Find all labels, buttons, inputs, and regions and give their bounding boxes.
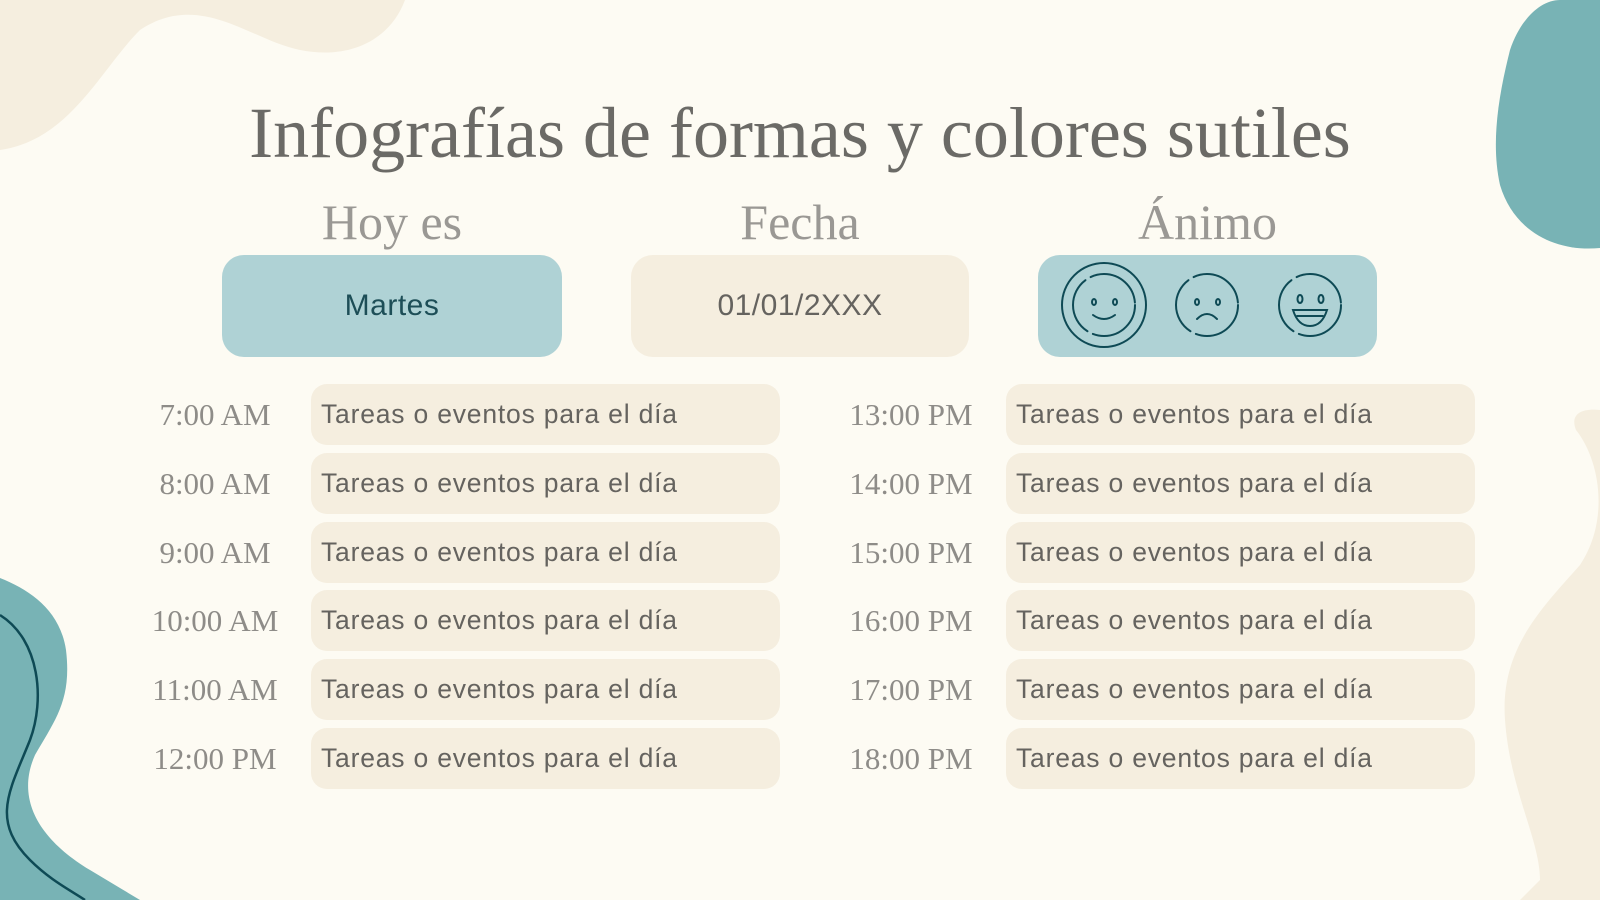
schedule: afternoon: 16:00 PM [849, 603, 973, 638]
schedule: afternoon: Tareas o eventos para el día [1016, 537, 1373, 567]
schedule: afternoon: 17:00 PM [849, 672, 973, 707]
icon: sad [1176, 274, 1238, 336]
schedule: afternoon: Tareas o eventos para el día [1016, 399, 1373, 429]
shape: bottom-left teal blob [0, 578, 140, 900]
heading: Hoy es: Hoy es [322, 194, 462, 250]
schedule: morning: Tareas o eventos para el día [321, 674, 678, 704]
box: day [222, 255, 562, 357]
schedule: morning: 7:00 AM [159, 397, 271, 432]
heading: Fecha: Fecha [740, 194, 860, 250]
schedule: morning: Tareas o eventos para el día [321, 537, 678, 567]
schedule: afternoon: 18:00 PM [849, 741, 973, 776]
schedule: morning: Tareas o eventos para el día [321, 468, 678, 498]
schedule: morning [152, 384, 780, 789]
schedule: morning: Tareas o eventos para el día [321, 743, 678, 773]
schedule: afternoon: Tareas o eventos para el día [1016, 743, 1373, 773]
shape: right cream blob [1505, 410, 1600, 900]
schedule: afternoon: Tareas o eventos para el día [1016, 468, 1373, 498]
schedule: afternoon: Tareas o eventos para el día [1016, 605, 1373, 635]
schedule: afternoon [849, 384, 1475, 789]
schedule: morning: 9:00 AM [159, 535, 271, 570]
icon: very happy [1279, 274, 1341, 336]
schedule: morning: 10:00 AM [152, 603, 278, 638]
shape: top-right teal blob [1496, 0, 1600, 249]
schedule: afternoon: 14:00 PM [849, 466, 973, 501]
shape: top-left cream blob [0, 0, 405, 150]
schedule: afternoon: 13:00 PM [849, 397, 973, 432]
box: date: 01/01/2XXX [717, 289, 883, 322]
schedule: morning: Tareas o eventos para el día [321, 399, 678, 429]
heading: Ánimo: Ánimo [1138, 194, 1277, 250]
schedule: afternoon: Tareas o eventos para el día [1016, 674, 1373, 704]
schedule: morning: 12:00 PM [153, 741, 277, 776]
box: mood [1038, 255, 1377, 357]
box: date [631, 255, 969, 357]
schedule: afternoon: 15:00 PM [849, 535, 973, 570]
icon: happy selected [1062, 263, 1146, 347]
schedule: morning: 11:00 AM [152, 672, 278, 707]
box: day: Martes [345, 289, 439, 322]
schedule: morning: 8:00 AM [159, 466, 271, 501]
schedule: morning: Tareas o eventos para el día [321, 605, 678, 635]
title: Infografías de formas y colores sutiles [249, 93, 1351, 173]
